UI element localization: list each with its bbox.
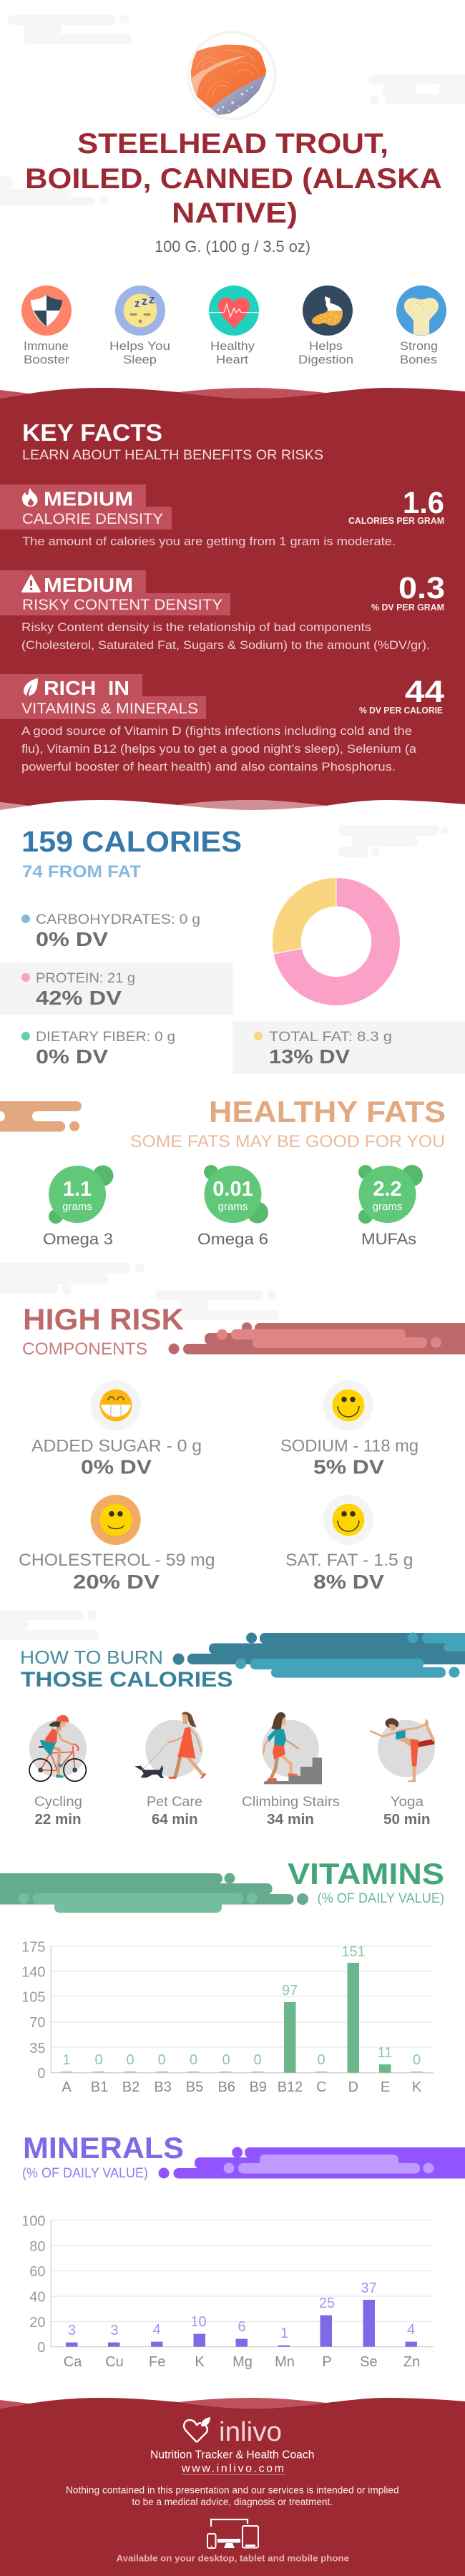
- bar chart: vitamins: K: [412, 2079, 422, 2095]
- bar chart: vitamins: D: [348, 2079, 358, 2095]
- component: sodium: [280, 1380, 418, 1478]
- bar chart: vitamins: 0: [190, 2052, 197, 2068]
- omega 3 bubble: grams: [62, 1201, 92, 1213]
- bar chart: minerals: 100: [21, 2214, 46, 2230]
- fact: calorie density: 1.6: [403, 486, 444, 520]
- bar chart: minerals: Fe: [149, 2354, 165, 2370]
- activity: yoga: Yoga: [391, 1795, 424, 1810]
- bar chart: vitamins: 175: [21, 1940, 46, 1956]
- bar chart: vitamins: 1: [62, 2052, 71, 2068]
- title: STEELHEAD TROUT,: [77, 128, 388, 160]
- label: helps digestion: [298, 340, 353, 366]
- decoration: tan bars: [0, 1101, 82, 1132]
- bar chart: minerals: [21, 2214, 434, 2370]
- icon: helps you sleep: z: [149, 293, 155, 306]
- subheading: percent of daily value: (% OF DAILY VALUE): [318, 1891, 444, 1906]
- omega 3 bubble: 1.1: [63, 1178, 92, 1201]
- nutrient: dietary fiber: 0% DV: [36, 1045, 108, 1068]
- heading line 2: THOSE CALORIES: [21, 1668, 233, 1692]
- fact: rich in vitamins and minerals: RICH IN: [44, 677, 129, 699]
- bar chart: vitamins: 0: [413, 2052, 421, 2068]
- heading: 159 calories: 159 CALORIES: [21, 825, 242, 858]
- activity: yoga: [371, 1718, 435, 1828]
- omega 6 bubble: 0.01: [212, 1178, 253, 1201]
- subheading: 74 from fat: 74 FROM FAT: [22, 862, 141, 882]
- bar chart: vitamins: 140: [21, 1965, 46, 1981]
- serving size: 100 G. (100 g / 3.5 oz): [155, 238, 310, 255]
- nutrient: carbohydrates: [21, 912, 200, 950]
- omega 6 bubble: Omega 6: [197, 1230, 268, 1248]
- bar chart: minerals: Mn: [275, 2354, 295, 2370]
- bar chart: vitamins: E: [381, 2079, 390, 2095]
- heading: vitamins: VITAMINS: [288, 1857, 444, 1890]
- mufas bubble: 2.2: [373, 1178, 402, 1201]
- label: strong bones: Strong: [400, 340, 438, 353]
- component: sodium: 5% DV: [313, 1456, 384, 1478]
- component: cholesterol: [19, 1495, 215, 1593]
- panel: healthy fats: [0, 1095, 446, 1248]
- mufas bubble: [358, 1165, 423, 1248]
- icon: helps you sleep: [115, 286, 165, 336]
- activity: climbing stairs: 34 min: [267, 1812, 314, 1828]
- component: cholesterol: 20% DV: [73, 1571, 160, 1593]
- panel: footer: [0, 2398, 465, 2576]
- activity: pet care: [134, 1712, 206, 1828]
- activity: climbing stairs: Climbing Stairs: [242, 1795, 340, 1810]
- nutrient: dietary fiber: DIETARY FIBER: 0 g: [36, 1029, 175, 1045]
- fact: rich in vitamins and minerals: flu), Vitamin B12 (helps you to get a good night’s sleep), Selenium (a: [21, 743, 417, 756]
- logo: inlivo: [184, 2417, 282, 2447]
- fact: risky content density: % DV PER GRAM: [371, 602, 444, 613]
- icon: strong bones: [396, 286, 446, 336]
- label: strong bones: Bones: [400, 353, 437, 366]
- bar chart: vitamins: A: [62, 2079, 72, 2095]
- bar chart: vitamins: 105: [21, 1990, 46, 2006]
- panel: vitamins: [0, 1857, 444, 2095]
- fact: calorie density: [0, 484, 444, 548]
- bar chart: vitamins: C: [316, 2079, 327, 2095]
- activity: climbing stairs: [242, 1712, 340, 1828]
- bar chart: minerals: 10: [190, 2314, 207, 2330]
- icon: helps digestion: [303, 286, 353, 336]
- bar chart: minerals: 3: [110, 2323, 119, 2338]
- icon: immune booster: [21, 286, 72, 336]
- fact: risky content density: [0, 570, 445, 652]
- mufas bubble: MUFAs: [361, 1230, 416, 1248]
- bar chart: minerals: 80: [29, 2239, 46, 2255]
- nutrient: protein: PROTEIN: 21 g: [36, 970, 135, 986]
- fact: risky content density: 0.3: [398, 571, 445, 605]
- bar chart: minerals: 4: [407, 2322, 415, 2338]
- nutrient: total fat: 13% DV: [269, 1045, 350, 1068]
- bar chart: vitamins: 11: [378, 2045, 392, 2061]
- component: added sugar: ADDED SUGAR - 0 g: [31, 1437, 202, 1456]
- panel: minerals: [21, 2131, 465, 2370]
- label: healthy heart: Heart: [216, 353, 248, 366]
- bar chart: vitamins: 0: [317, 2052, 326, 2068]
- nutrient: carbohydrates: 0% DV: [36, 928, 108, 950]
- omega 6 bubble: grams: [218, 1201, 248, 1213]
- bar chart: vitamins: 70: [29, 2015, 46, 2031]
- bar chart: vitamins: B3: [154, 2079, 172, 2095]
- icon: helps you sleep: z: [134, 298, 140, 310]
- title: NATIVE): [172, 197, 298, 229]
- panel: how to burn those calories: [20, 1633, 465, 1828]
- website link: www.inlivo.com: [181, 2463, 284, 2475]
- nutrient: total fat: [232, 1021, 465, 1074]
- bar chart: minerals: 40: [29, 2290, 46, 2306]
- decoration: purple bars: [159, 2147, 465, 2178]
- bar chart: vitamins: 0: [94, 2052, 103, 2068]
- bar chart: minerals: 25: [319, 2296, 335, 2311]
- heading: key facts: KEY FACTS: [22, 419, 162, 446]
- bar chart: minerals: 0: [37, 2340, 46, 2356]
- food photo: steelhead trout steak: [189, 32, 275, 119]
- bar chart: vitamins: B12: [278, 2079, 303, 2095]
- availability note: Available on your desktop, tablet and mobile phone: [116, 2553, 349, 2564]
- subheading: SOME FATS MAY BE GOOD FOR YOU: [130, 1132, 445, 1151]
- bar chart: vitamins: [21, 1940, 434, 2095]
- fact: calorie density: CALORIES PER GRAM: [348, 515, 444, 526]
- panel: high risk components: [19, 1302, 465, 1593]
- nutrient: dietary fiber: [21, 1029, 175, 1068]
- bar chart: minerals: 37: [361, 2280, 377, 2296]
- disclaimer: [66, 2484, 399, 2507]
- fact: calorie density: CALORIE DENSITY: [22, 511, 163, 527]
- component: added sugar: [31, 1380, 202, 1478]
- bar chart: minerals: 60: [29, 2264, 46, 2280]
- bar chart: minerals: Mg: [232, 2354, 253, 2370]
- fact: risky content density: (Cholesterol, Saturated Fat, Sugars & Sodium) to the amount (%DV/gr).: [21, 639, 430, 652]
- decoration: teal bars: [173, 1633, 465, 1678]
- label: healthy heart: [210, 340, 255, 366]
- fact: rich in vitamins and minerals: VITAMINS & MINERALS: [21, 701, 198, 717]
- label: helps you sleep: [109, 340, 170, 366]
- bar chart: vitamins: 0: [253, 2052, 262, 2068]
- heading line 1: HOW TO BURN: [20, 1646, 163, 1668]
- panel: calories: [0, 825, 465, 1074]
- label: helps digestion: Digestion: [298, 353, 353, 366]
- fact: risky content density: MEDIUM: [44, 574, 133, 596]
- fact: rich in vitamins and minerals: [0, 674, 444, 774]
- bar chart: minerals: 1: [280, 2326, 288, 2341]
- label: immune booster: [24, 340, 70, 366]
- icon: devices: [207, 2519, 258, 2548]
- activity: cycling: 22 min: [34, 1812, 82, 1828]
- fact: risky content density: Risky Content density is the relationship of bad components: [21, 621, 371, 634]
- nutrient: carbohydrates: CARBOHYDRATES: 0 g: [36, 912, 200, 927]
- bar chart: vitamins: 0: [157, 2052, 166, 2068]
- bar chart: vitamins: B6: [217, 2079, 235, 2095]
- bar chart: minerals: Ca: [64, 2354, 82, 2370]
- fact: rich in vitamins and minerals: % DV PER CALORIE: [359, 705, 443, 716]
- label: healthy heart: Healthy: [210, 340, 255, 353]
- tagline: Nutrition Tracker & Health Coach: [150, 2449, 315, 2462]
- omega 3 bubble: [43, 1165, 113, 1248]
- bar chart: vitamins: 0: [37, 2066, 46, 2082]
- bar chart: minerals: 6: [238, 2319, 246, 2335]
- bar chart: minerals: 20: [29, 2315, 46, 2331]
- component: cholesterol: CHOLESTEROL - 59 mg: [19, 1551, 215, 1570]
- bar chart: vitamins: B5: [186, 2079, 203, 2095]
- subheading: percent of daily value: (% OF DAILY VALUE): [22, 2166, 148, 2181]
- bar chart: vitamins: 151: [341, 1944, 366, 1960]
- component: added sugar: 0% DV: [81, 1456, 152, 1478]
- bar chart: vitamins: B9: [249, 2079, 267, 2095]
- subheading: LEARN ABOUT HEALTH BENEFITS OR RISKS: [22, 448, 323, 463]
- nutrient: total fat: TOTAL FAT: 8.3 g: [269, 1029, 392, 1045]
- label: helps you sleep: Helps You: [109, 340, 170, 353]
- label: helps you sleep: Sleep: [123, 353, 157, 366]
- bar chart: minerals: 4: [152, 2322, 161, 2338]
- bar chart: minerals: K: [195, 2354, 205, 2370]
- component: saturated fat: 8% DV: [313, 1571, 384, 1593]
- bar chart: minerals: 3: [68, 2323, 76, 2338]
- component: sodium: SODIUM - 118 mg: [280, 1437, 418, 1456]
- fact: rich in vitamins and minerals: 44: [405, 675, 444, 709]
- omega 6 bubble: [197, 1165, 268, 1248]
- fact: rich in vitamins and minerals: A good source of Vitamin D (fights infections including cold and the: [21, 725, 412, 738]
- benefits row: [21, 286, 446, 366]
- bar chart: minerals: Zn: [403, 2354, 420, 2370]
- decoration: green bars: [0, 1873, 308, 1913]
- activity: cycling: [29, 1715, 87, 1828]
- title: BOILED, CANNED (ALASKA: [25, 163, 442, 195]
- fact: risky content density: RISKY CONTENT DENSITY: [22, 597, 222, 613]
- icon: helps you sleep: z: [142, 296, 147, 308]
- panel: key facts: [0, 388, 465, 810]
- fact: calorie density: The amount of calories you are getting from 1 gram is moderate.: [22, 535, 396, 548]
- bar chart: vitamins: 0: [222, 2052, 230, 2068]
- label: immune booster: Booster: [24, 353, 70, 366]
- bar chart: vitamins: 97: [282, 1983, 298, 1999]
- bar chart: minerals: Cu: [105, 2354, 124, 2370]
- activity: pet care: Pet Care: [147, 1795, 202, 1810]
- title: [25, 128, 442, 229]
- bar chart: vitamins: 35: [29, 2041, 46, 2057]
- bar chart: vitamins: B2: [122, 2079, 140, 2095]
- component: saturated fat: SAT. FAT - 1.5 g: [285, 1551, 413, 1570]
- label: immune booster: Immune: [24, 340, 69, 353]
- icon: healthy heart: [209, 286, 259, 336]
- decoration: red bars: [169, 1322, 465, 1355]
- activity: cycling: Cycling: [34, 1795, 82, 1810]
- label: helps digestion: Helps: [309, 340, 343, 353]
- bar chart: minerals: P: [322, 2354, 332, 2370]
- disclaimer: Nothing contained in this presentation and our services is intended or implied: [66, 2484, 399, 2496]
- heading: high risk: HIGH RISK: [23, 1302, 184, 1336]
- fact: rich in vitamins and minerals: powerful booster of heart health) and also contains Phosphorus.: [21, 761, 396, 774]
- label: strong bones: [400, 340, 438, 366]
- mufas bubble: grams: [373, 1201, 402, 1213]
- activity: pet care: 64 min: [152, 1812, 197, 1828]
- omega 3 bubble: Omega 3: [43, 1230, 113, 1248]
- bar chart: vitamins: 0: [126, 2052, 134, 2068]
- logo: inlivo: inlivo: [219, 2417, 282, 2447]
- nutrient: protein: [0, 962, 233, 1015]
- bar chart: minerals: Se: [360, 2354, 378, 2370]
- subheading: components: COMPONENTS: [22, 1340, 147, 1359]
- donut chart: [272, 877, 400, 1005]
- heading: healthy fats: HEALTHY FATS: [209, 1095, 446, 1128]
- disclaimer: to be a medical advice, diagnosis or treatment.: [132, 2497, 333, 2507]
- nutrient: protein: 42% DV: [36, 987, 122, 1009]
- heading: minerals: MINERALS: [23, 2131, 184, 2165]
- bar chart: vitamins: B1: [91, 2079, 108, 2095]
- fact: calorie density: MEDIUM: [44, 488, 133, 509]
- activity: yoga: 50 min: [383, 1812, 431, 1828]
- component: saturated fat: [285, 1495, 413, 1593]
